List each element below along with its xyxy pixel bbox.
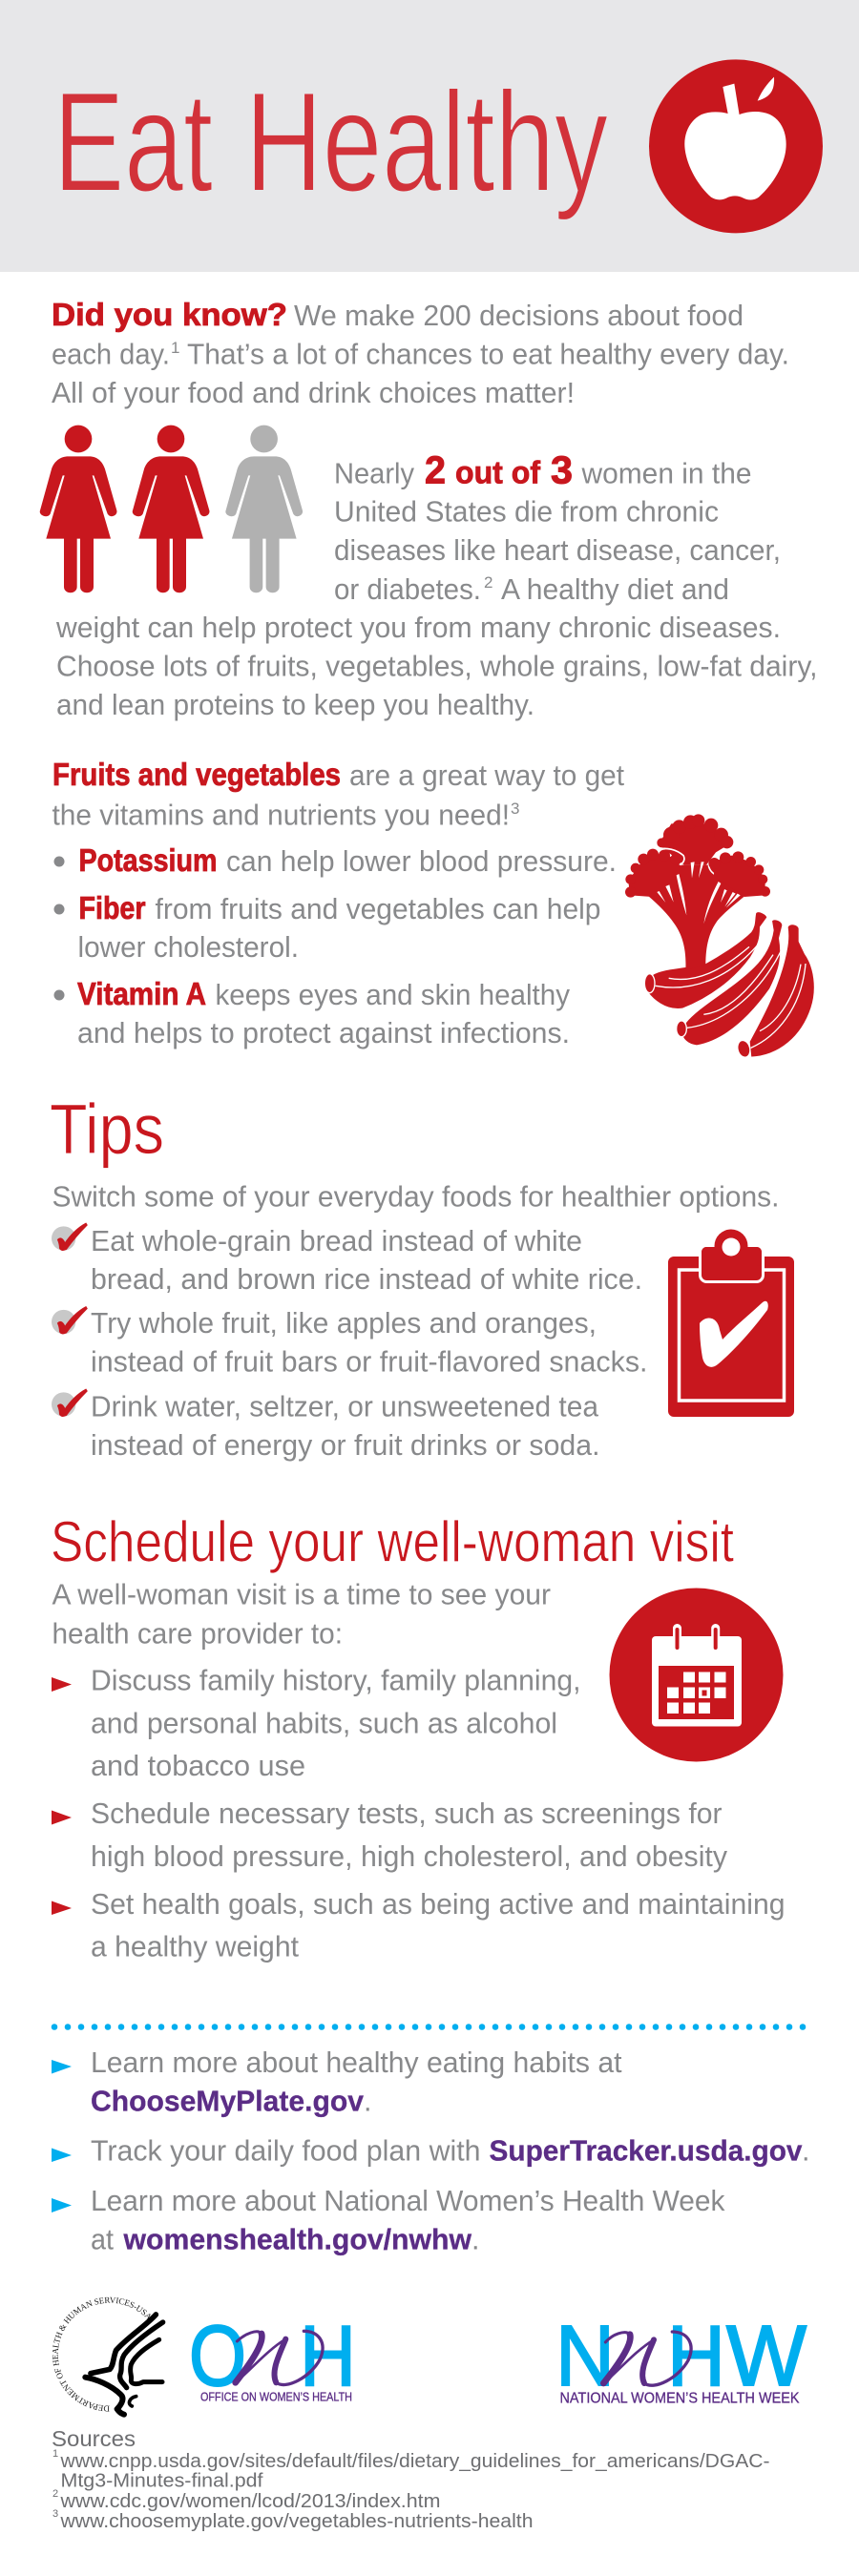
woman 2: [133, 426, 209, 592]
woman 1: [40, 426, 116, 592]
tip 3: Drink water, seltzer, or unsweetened tea: [91, 1391, 598, 1423]
link item: womenshealth: [52, 2185, 725, 2255]
intro text: did you know: Did you know?: [52, 297, 287, 332]
text block: 2 out of 3 women: Nearly: [334, 458, 415, 490]
list: learn more links: [52, 2046, 809, 2255]
text block: fruits and vegetables: Fruits and vegetables: [52, 757, 341, 792]
heading: schedule your well-woman visit: Schedule your well-woman visit: [51, 1509, 734, 1574]
item: set health goals: a healthy weight: [91, 1931, 300, 1963]
icon: calendar in circle: [609, 1588, 783, 1761]
title: [53, 62, 608, 221]
title: Healthy: [245, 62, 608, 221]
sources: [52, 2426, 769, 2532]
tip 1: Eat whole-grain bread instead of white: [91, 1225, 582, 1257]
text block: 2 out of 3 women: weight can help protect you from many chronic diseases.: [55, 612, 781, 644]
title: Eat: [53, 62, 213, 221]
sources: 3: [52, 2508, 58, 2520]
item: discuss family history: and tobacco use: [91, 1750, 305, 1782]
bullet: fiber: [53, 890, 601, 964]
tip 3: instead of energy or fruit drinks or soda.: [91, 1429, 599, 1462]
logo: office on women's health: H: [300, 2309, 356, 2404]
logo: national women's health week: H: [667, 2309, 725, 2404]
icon: apple: [649, 59, 823, 233]
text: well-woman visit intro: [52, 1578, 551, 1651]
logo: national women's health week: N: [555, 2309, 615, 2404]
bullet: fiber: Fiber: [78, 890, 146, 925]
item: discuss family history: Discuss family history, family planning,: [91, 1664, 580, 1696]
icon: broccoli and bananas: [625, 814, 814, 1059]
sources: www.choosemyplate.gov/vegetables-nutrients-health: [59, 2510, 533, 2532]
list: well-woman visit items: [52, 1664, 785, 1963]
bullet: vitamin A: Vitamin A: [77, 976, 206, 1011]
link item: supertracker: [52, 2133, 809, 2168]
logo: office on women's health: OFFICE ON WOMEN’S HEALTH: [200, 2391, 352, 2404]
bullet: fiber: from fruits and vegetables can help: [155, 893, 601, 925]
bullet: potassium: can help lower blood pressure.: [226, 845, 617, 878]
text block: 2 out of 3 women: out of: [455, 454, 541, 490]
banana 1: [644, 912, 767, 1009]
logo: national women's health week: [555, 2309, 807, 2406]
link item: supertracker: Track your daily food plan with: [91, 2135, 481, 2168]
bullet: vitamin A: keeps eyes and skin healthy: [216, 979, 571, 1011]
text block: fruits and vegetables: are a great way to get: [349, 759, 625, 792]
bullet: potassium: Potassium: [78, 842, 218, 878]
link item: womenshealth: womenshealth.gov/nwhw: [123, 2223, 472, 2255]
text: switch some foods: Switch some of your everyday foods for healthier options.: [52, 1181, 779, 1214]
heading: tips: Tips: [50, 1090, 164, 1169]
text block: 2 out of 3 women: A healthy diet and: [501, 573, 729, 606]
intro text: did you know: We make 200 decisions about food: [294, 300, 744, 332]
text block: 2 out of 3 women: [55, 448, 818, 721]
item: set health goals: Set health goals, such as being active and maintaining: [91, 1888, 785, 1921]
link item: choosemyplate: ChooseMyPlate.gov: [91, 2084, 365, 2118]
link item: choosemyplate: Learn more about healthy eating habits at: [91, 2046, 622, 2079]
link item: choosemyplate: [52, 2046, 622, 2118]
item: discuss family history: and personal habits, such as alcohol: [91, 1708, 557, 1740]
link item: womenshealth: Learn more about National Women’s Health Week: [91, 2185, 725, 2217]
text block: 2 out of 3 women: and lean proteins to keep you healthy.: [56, 689, 534, 721]
text block: 2 out of 3 women: 2: [425, 448, 446, 492]
text block: fruits and vegetables: the vitamins and nutrients you need!: [52, 800, 510, 832]
bullet: potassium: [53, 842, 617, 878]
tips checklist: [52, 1223, 647, 1462]
tip 3: [52, 1389, 599, 1462]
icon: three women, two red and one gray: [40, 426, 303, 592]
text block: 2 out of 3 women: 3: [551, 448, 573, 492]
text block: 2 out of 3 women: 2: [484, 573, 492, 592]
text block: 2 out of 3 women: United States die from chronic: [334, 496, 719, 529]
text: well-woman visit intro: A well-woman visit is a time to see your: [52, 1578, 551, 1610]
bullet: vitamin A: and helps to protect against infections.: [77, 1017, 570, 1049]
link item: choosemyplate: .: [364, 2086, 371, 2118]
logo: office on women's health: [189, 2309, 356, 2404]
item: discuss family history: [52, 1664, 580, 1782]
tip 1: [52, 1223, 642, 1296]
link item: womenshealth: at: [91, 2223, 114, 2255]
intro text: did you know: each day.: [52, 338, 170, 370]
tip 1: bread, and brown rice instead of white rice.: [91, 1263, 642, 1296]
banana 3: [736, 924, 814, 1059]
text block: 2 out of 3 women: or diabetes.: [334, 573, 481, 606]
sources: Sources: [52, 2426, 136, 2451]
tip 2: [52, 1307, 647, 1378]
woman 3: [225, 426, 303, 592]
sources: www.cnpp.usda.gov/sites/default/files/dietary_guidelines_for_americans/DGAC-: [59, 2450, 769, 2472]
link item: womenshealth: .: [471, 2223, 479, 2255]
text block: 2 out of 3 women: Choose lots of fruits, vegetables, whole grains, low-fat dairy,: [56, 651, 817, 683]
intro text: did you know: That’s a lot of chances to eat healthy every day.: [187, 338, 789, 370]
text block: 2 out of 3 women: women in the: [581, 458, 752, 490]
sources: www.cdc.gov/women/lcod/2013/index.htm: [59, 2490, 440, 2512]
item: schedule tests: high blood pressure, high cholesterol, and obesity: [91, 1840, 728, 1873]
link item: supertracker: .: [802, 2135, 809, 2168]
sources: 2: [52, 2488, 58, 2500]
tip 2: Try whole fruit, like apples and oranges,: [91, 1307, 597, 1340]
item: schedule tests: [52, 1797, 728, 1873]
logo: office on women's health: O: [189, 2309, 246, 2404]
text block: 2 out of 3 women: diseases like heart disease, cancer,: [334, 534, 781, 567]
text: well-woman visit intro: health care provider to:: [52, 1618, 343, 1651]
intro text: did you know: 1: [171, 339, 179, 357]
icon: clipboard with check: [668, 1229, 794, 1417]
logo: national women's health week: NATIONAL WOMEN’S HEALTH WEEK: [559, 2391, 800, 2406]
bullet: vitamin A: [53, 976, 571, 1049]
link item: supertracker: SuperTracker.usda.gov: [489, 2133, 803, 2168]
logo: national women's health week: W: [726, 2309, 807, 2404]
tip 2: instead of fruit bars or fruit-flavored snacks.: [91, 1345, 647, 1378]
item: schedule tests: Schedule necessary tests, such as screenings for: [91, 1797, 722, 1830]
item: set health goals: [52, 1888, 785, 1963]
text block: fruits and vegetables: [52, 757, 625, 1049]
intro text: did you know: All of your food and drink choices matter!: [52, 377, 575, 409]
text block: fruits and vegetables: 3: [511, 800, 519, 818]
banana 2: [677, 920, 783, 1046]
sources: 1: [52, 2448, 58, 2460]
logo: HHS seal: DEPARTMENT OF HEALTH & HUMAN SERVICES-USA: [52, 2297, 151, 2412]
header band: [0, 0, 859, 272]
intro text: did you know: [52, 297, 789, 409]
sources: Mtg3-Minutes-final.pdf: [61, 2469, 263, 2492]
bullet: fiber: lower cholesterol.: [78, 931, 299, 964]
broccoli: [625, 814, 770, 970]
